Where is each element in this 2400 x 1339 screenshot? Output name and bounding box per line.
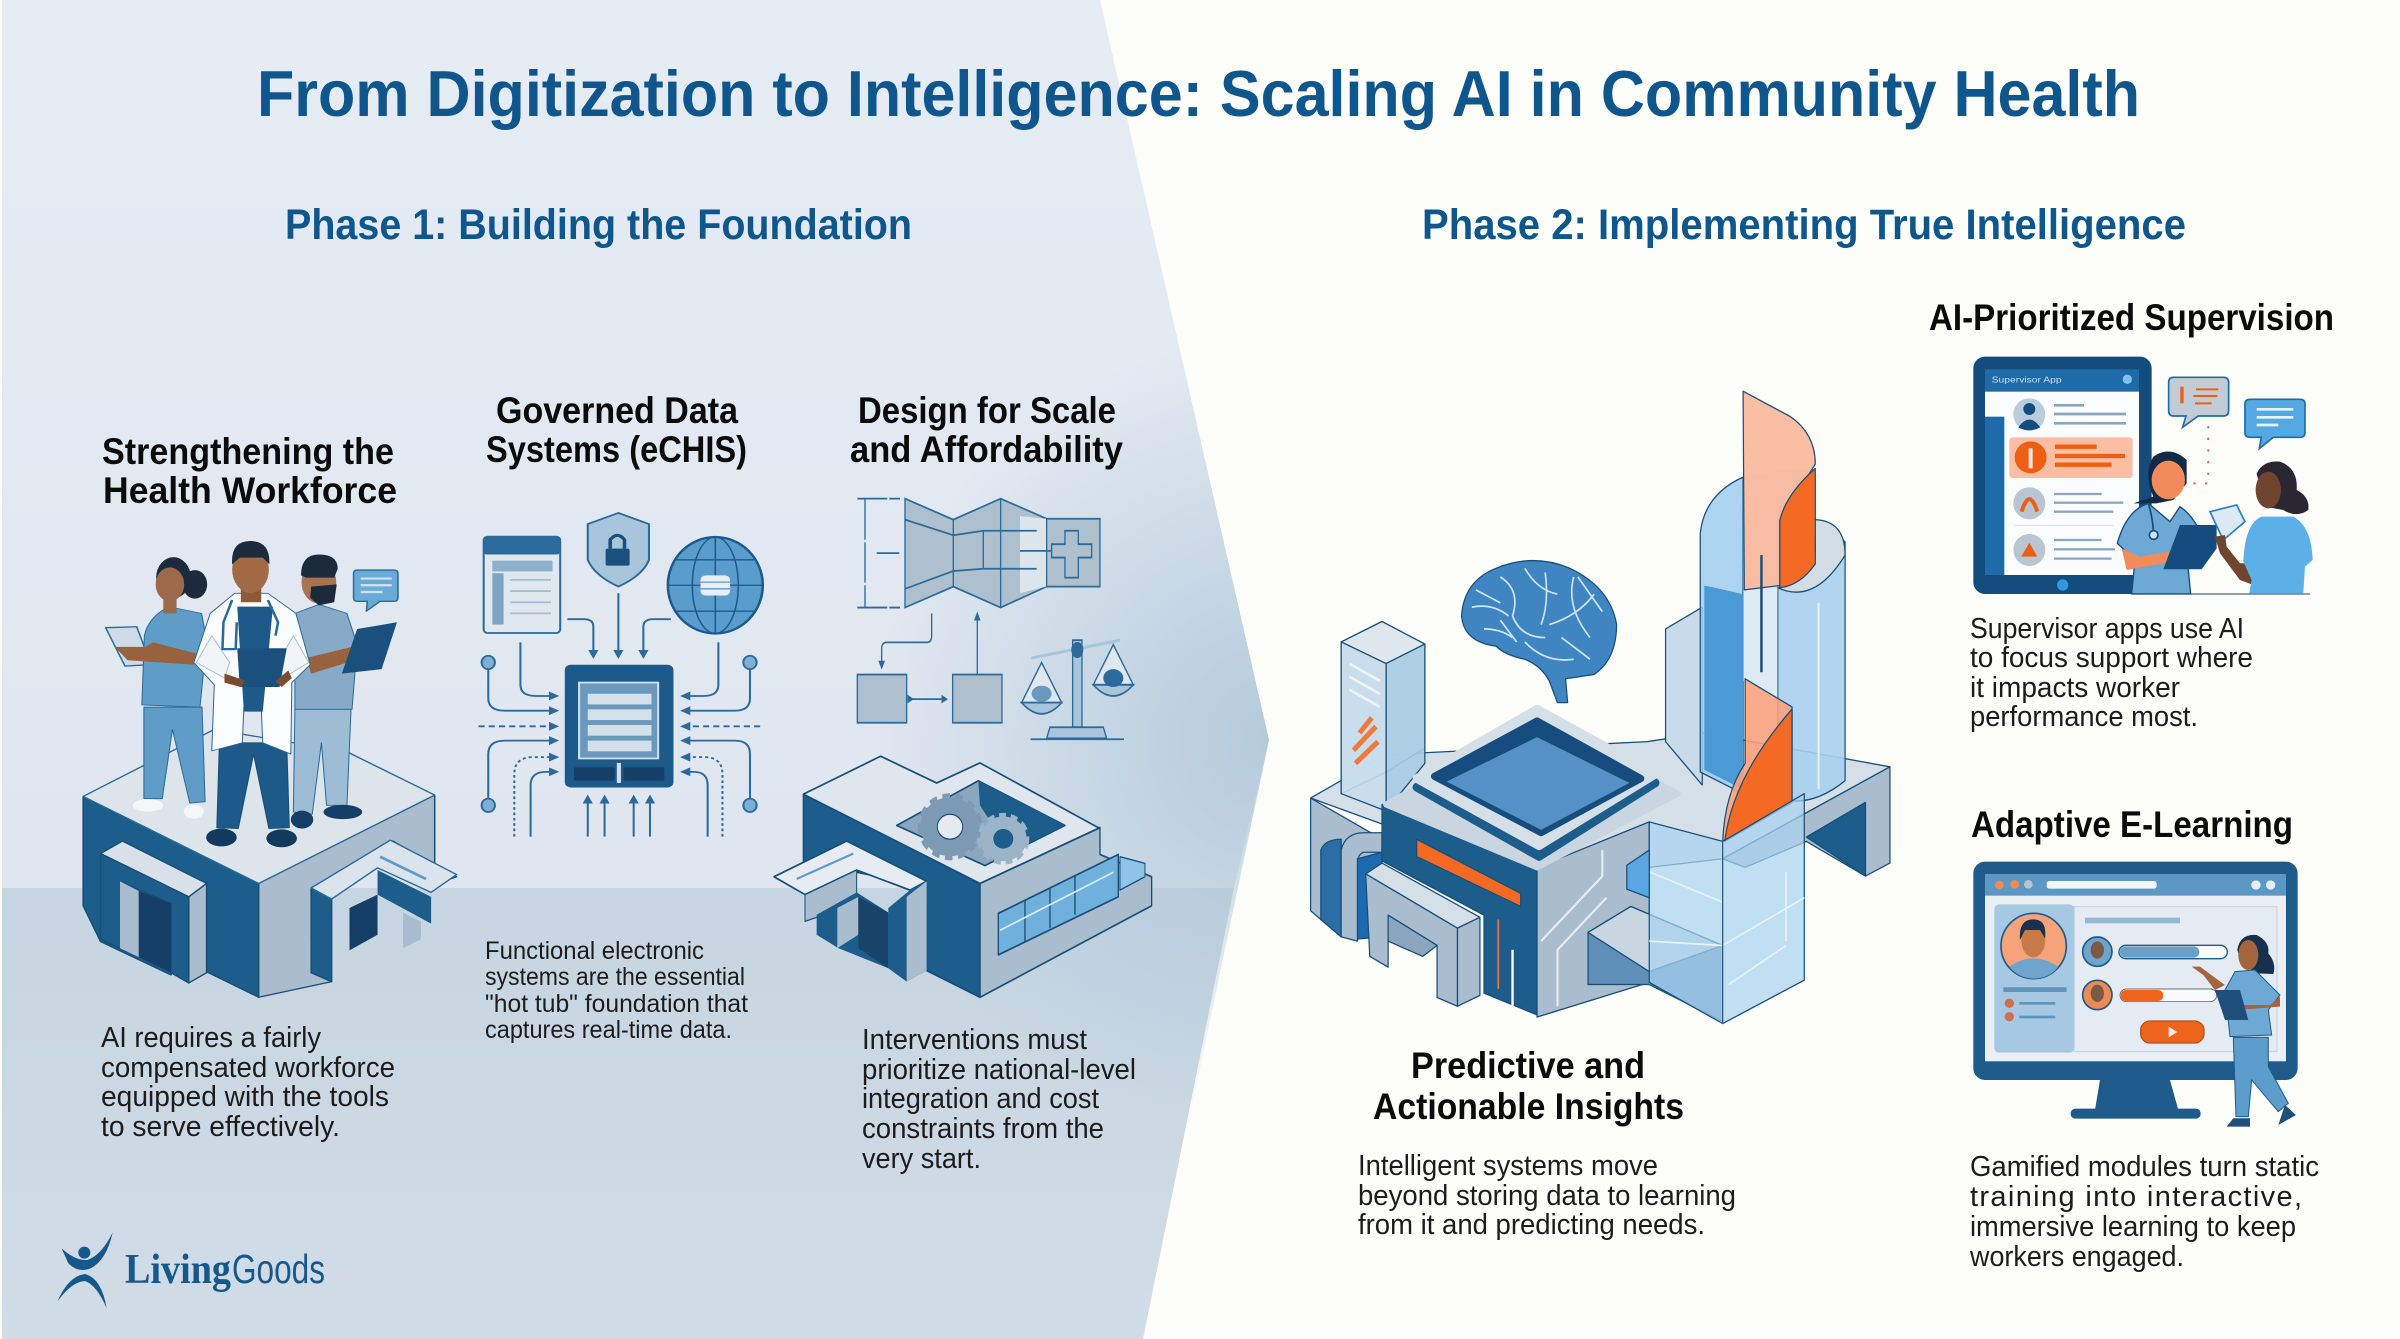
illustration: health workers on platform (83, 541, 457, 997)
text: design description (862, 1024, 1136, 1175)
icon: central data chip (565, 665, 673, 787)
panel: phase 1 background (2, 0, 1269, 1339)
text: e-learning description: workers engaged. (1969, 1241, 2184, 1273)
illustration: governed data systems (479, 513, 763, 837)
text: e-learning description (1969, 1151, 2319, 1273)
glass cube (1588, 794, 1804, 1024)
icon: blue brain (1462, 561, 1617, 703)
logo wordmark: Living: Living (125, 1247, 231, 1293)
icon: speech bubble (354, 570, 398, 611)
heading: AI-prioritized supervision: AI-Prioritized Supervision (1929, 297, 2334, 338)
heading: design for scale: and Affordability (850, 429, 1123, 470)
icon: logo figure (57, 1232, 113, 1308)
icon: technician with tablet (291, 554, 397, 829)
icon: security shield (588, 513, 649, 587)
icon: building with gears (774, 756, 1152, 997)
text: workforce description: to serve effectively. (101, 1111, 340, 1143)
heading: phase 2: Phase 2: Implementing True Intelligence (1422, 201, 2186, 249)
icon: app window (484, 537, 560, 633)
text: design description: constraints from the (862, 1113, 1104, 1145)
text: predictive description: beyond storing data to learning (1358, 1180, 1736, 1212)
text: e-learning description: training into interactive, (1970, 1181, 2302, 1213)
logo wordmark: Goods: Goods (232, 1246, 325, 1292)
text: data systems description: systems are the essential (485, 963, 745, 991)
heading: predictive and actionable insights: Predictive and (1411, 1045, 1645, 1086)
text: supervision description: performance most. (1970, 701, 2198, 733)
text: supervision description (1970, 613, 2253, 733)
heading: strengthening the health workforce (102, 431, 397, 511)
text: data systems description: Functional electronic (485, 937, 704, 965)
text: workforce description (101, 1022, 395, 1143)
icon: tablet with list: Supervisor App (1992, 376, 2062, 385)
illustration: e-learning monitor (1973, 862, 2298, 1127)
entrance arch (1366, 863, 1480, 1006)
heading: predictive and actionable insights: Actionable Insights (1373, 1086, 1684, 1127)
heading: strengthening the health workforce: Health Workforce (103, 470, 397, 511)
text: data systems description: "hot tub" foundation that (485, 990, 748, 1018)
text: predictive description: from it and predicting needs. (1358, 1209, 1705, 1241)
text: workforce description: AI requires a fairly (101, 1022, 321, 1054)
text: e-learning description: immersive learning to keep (1970, 1211, 2296, 1243)
flow boxes (857, 613, 1002, 723)
icon: presenting health worker (2192, 935, 2296, 1127)
icon: speech bubbles (2169, 377, 2305, 483)
icon: monitor (1973, 862, 2298, 1119)
heading: phase 1: Phase 1: Building the Foundation (285, 201, 912, 249)
illustration: supervisor app (1973, 357, 2313, 594)
central processor block (1382, 709, 1678, 1017)
heading: governed data systems: Governed Data (496, 390, 738, 431)
title: From Digitization to Intelligence: Scaling AI in Community Health (257, 57, 2140, 130)
text: predictive description (1358, 1150, 1736, 1241)
icon: balance scale (1022, 640, 1133, 739)
text: supervision description: to focus support where (1970, 642, 2253, 674)
text: supervision description: Supervisor apps use AI (1970, 613, 2244, 645)
text: data systems description (485, 937, 748, 1044)
heading: design for scale (850, 390, 1123, 470)
heading: governed data systems (486, 390, 747, 470)
cylinders and ribbon (1666, 391, 1845, 841)
heading: strengthening the health workforce: Strengthening the (102, 431, 394, 472)
text: design description: Interventions must (862, 1024, 1087, 1056)
glass data tower (1341, 622, 1425, 811)
icon: doctor in white coat (194, 541, 310, 847)
text: predictive description: Intelligent systems move (1358, 1150, 1658, 1182)
base platform (1311, 733, 1890, 941)
illustration: design for scale and affordability (774, 499, 1152, 997)
icon: blueprint (905, 499, 1100, 608)
text: workforce description: equipped with the tools (101, 1081, 389, 1113)
icon: nurse with tablet (106, 557, 207, 819)
text: workforce description: compensated workforce (101, 1052, 395, 1084)
heading: design for scale: Design for Scale (858, 390, 1116, 431)
heading: predictive and actionable insights (1373, 1045, 1684, 1127)
logo: LivingGoods (57, 1232, 325, 1308)
text: design description: prioritize national-level (862, 1054, 1136, 1086)
heading: governed data systems: Systems (eCHIS) (486, 429, 747, 470)
text: data systems description: captures real-time data. (485, 1016, 732, 1044)
text: supervision description: it impacts worker (1970, 672, 2180, 704)
icon: globe with database (668, 537, 763, 633)
icon: tablet with list (1973, 357, 2152, 594)
heading: adaptive e-learning: Adaptive E-Learning (1971, 804, 2293, 845)
icon: two health workers (2117, 452, 2313, 594)
text: design description: integration and cost (862, 1083, 1099, 1115)
icon: dimension arrows (857, 499, 900, 608)
text: e-learning description: Gamified modules turn static (1970, 1151, 2319, 1183)
illustration: predictive intelligence platform (1311, 391, 1890, 1024)
connectors (479, 593, 760, 837)
text: design description: very start. (862, 1143, 981, 1175)
